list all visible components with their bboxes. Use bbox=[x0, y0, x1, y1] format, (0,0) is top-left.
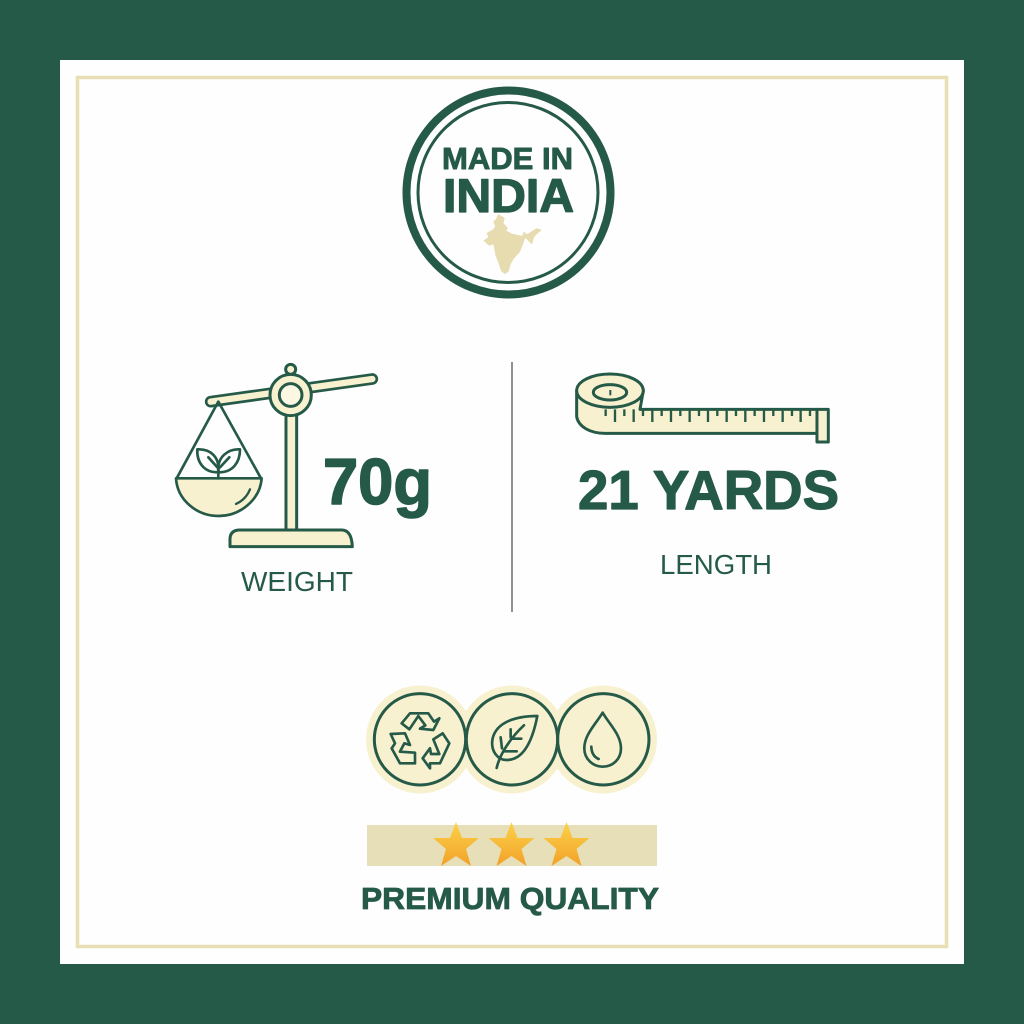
roll centre mark bbox=[607, 390, 613, 395]
value: 21 yards: 21 YARDS bbox=[578, 459, 839, 521]
cream icon backdrops bbox=[366, 686, 657, 794]
seal inner ring bbox=[418, 102, 598, 282]
star rating bbox=[433, 822, 590, 866]
roll top bbox=[577, 374, 643, 407]
icon: water drop bbox=[558, 694, 649, 785]
central divider bbox=[511, 362, 513, 612]
value: 70g: 70g bbox=[323, 445, 432, 518]
icon: leaf bbox=[466, 694, 558, 785]
scale top knob bbox=[286, 364, 296, 374]
icon: recycle bbox=[374, 694, 466, 785]
roll centre bbox=[593, 385, 627, 400]
icon: map of india bbox=[484, 215, 541, 273]
icon: measuring tape bbox=[577, 374, 828, 442]
tape body bbox=[577, 391, 817, 433]
tape ticks bbox=[606, 409, 810, 422]
label: length: LENGTH bbox=[660, 549, 772, 580]
label: weight: WEIGHT bbox=[241, 566, 353, 597]
tape end tab bbox=[817, 409, 828, 442]
pan bowl bbox=[176, 478, 262, 516]
seal outer ring bbox=[406, 90, 610, 294]
star 3 bbox=[544, 822, 590, 866]
rating banner bbox=[367, 825, 657, 866]
scale pivot bbox=[270, 374, 311, 416]
leaf sprout bbox=[197, 449, 240, 478]
scale beam fill bbox=[211, 379, 372, 402]
badge: made in india seal bbox=[406, 90, 610, 294]
star 1 bbox=[433, 822, 479, 866]
scale post bbox=[286, 413, 297, 531]
pan highlight bbox=[236, 489, 250, 504]
section: weight bbox=[176, 364, 432, 597]
seal text: india: INDIA bbox=[443, 169, 574, 222]
star 2 bbox=[488, 822, 534, 866]
pan strings bbox=[177, 402, 261, 478]
section: eco icons bbox=[366, 686, 657, 794]
beige inner frame bbox=[78, 78, 946, 946]
scale pivot inner bbox=[279, 384, 302, 406]
white panel bbox=[60, 60, 964, 964]
scale base bbox=[230, 530, 352, 547]
label: premium quality: PREMIUM QUALITY bbox=[361, 881, 659, 916]
seal text: made in: MADE IN bbox=[442, 141, 573, 176]
icon: balance scale with leaf bbox=[176, 364, 372, 547]
section: length bbox=[577, 374, 839, 580]
section: premium quality bbox=[361, 822, 659, 916]
scale beam outline bbox=[211, 379, 372, 402]
